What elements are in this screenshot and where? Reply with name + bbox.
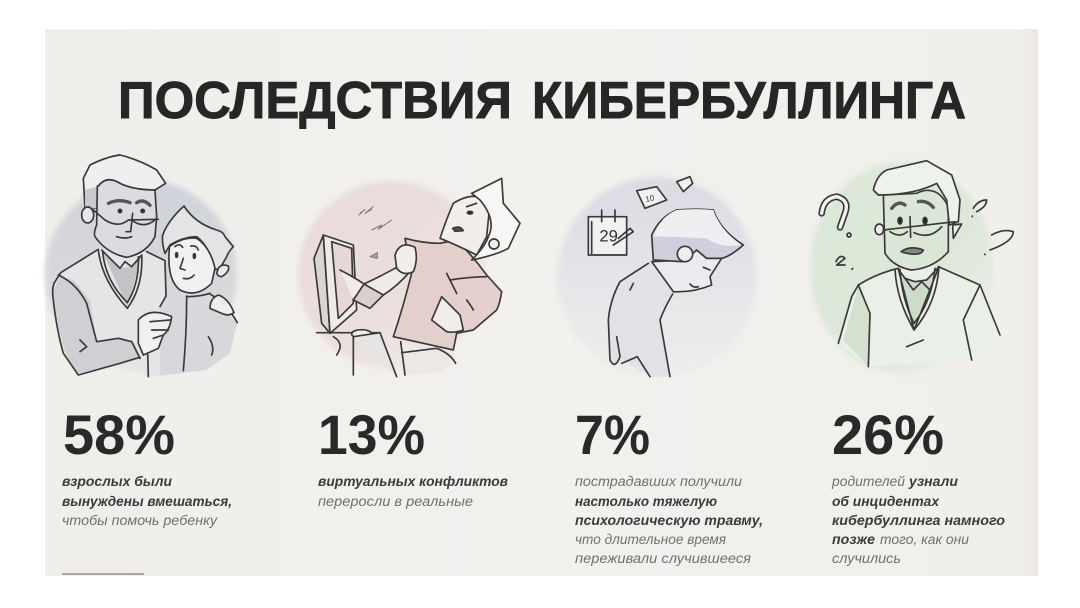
stat: 26%: того, как они (880, 532, 969, 547)
illustration: adult comforting child (53, 155, 237, 377)
stat: 26%: 26% (832, 403, 944, 466)
watercolor circle: blue-grey (45, 179, 237, 371)
stat: 26%: случились (832, 551, 901, 566)
stat: 13% (318, 403, 508, 509)
stat: 58%: 58% (63, 403, 175, 466)
stat: 26%: родителей (831, 474, 906, 489)
calendar day 29: 29 (599, 227, 618, 246)
stat: 58%: чтобы помочь ребенку (62, 513, 218, 528)
illustration: hand from monitor grabbing a boy (314, 178, 520, 377)
stat: 13%: переросли в реальные (318, 494, 473, 509)
footnote rule (62, 573, 144, 575)
stat: 7%: психологическую травму, (575, 513, 763, 528)
stat: 7%: переживали случившееся (575, 551, 751, 566)
stat: 58%: взрослых были (62, 474, 173, 489)
watercolor circle: green (810, 162, 994, 374)
stat: 13%: виртуальных конфликтов (318, 474, 508, 489)
stat: 26%: об инцидентах (832, 494, 939, 509)
stat: 26%: узнали (908, 474, 959, 489)
stat: 26%: позже (832, 532, 876, 547)
stat: 7%: настолько тяжелую (575, 494, 717, 509)
watercolor circle: violet (557, 177, 757, 377)
stat: 7%: пострадавших получили (575, 474, 743, 489)
stat: 7% (575, 403, 763, 566)
stat: 26%: кибербуллинга намного (832, 513, 1005, 528)
title: ПОСЛЕДСТВИЯ (118, 72, 512, 130)
stat: 7%: что длительное время (575, 532, 726, 547)
title (118, 72, 966, 130)
stat: 58% (62, 403, 232, 528)
illustration: sad boy with calendars (588, 177, 743, 377)
calendar day 10: 10 (645, 193, 656, 204)
stat: 7%: 7% (575, 403, 650, 466)
stat: 58%: вынуждены вмешаться, (62, 494, 232, 509)
stat: 13%: 13% (318, 403, 425, 466)
title: КИБЕРБУЛЛИНГА (532, 72, 966, 130)
illustration: confused parent with question marks (822, 161, 1013, 367)
watercolor circle: pink (298, 181, 486, 369)
stat: 26% (831, 403, 1005, 566)
